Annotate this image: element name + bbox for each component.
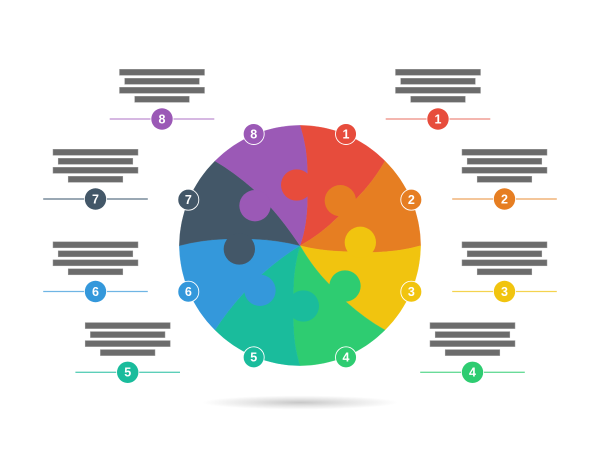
wheel badge 5 <box>243 347 264 368</box>
label block 6: 6 <box>92 285 99 299</box>
wheel badge 8: 8 <box>250 127 257 141</box>
tab teal <box>288 290 319 322</box>
wheel badge 2: 2 <box>408 193 415 207</box>
label block 2 <box>452 149 557 210</box>
wheel badge 3: 3 <box>408 285 415 299</box>
label block 3: 3 <box>501 285 508 299</box>
wheel badge 3 <box>401 281 422 302</box>
piece 1 red <box>300 125 385 246</box>
tab yellow <box>345 227 376 258</box>
label block 7 <box>43 149 148 210</box>
label block 5: 5 <box>124 366 131 380</box>
piece 2 orange <box>300 161 421 252</box>
label block 4 <box>420 323 525 383</box>
label block 5 <box>75 323 180 383</box>
label block 7: 7 <box>92 192 99 206</box>
wheel badge 4 <box>336 347 356 368</box>
piece 5 teal <box>215 246 300 366</box>
label block 3 <box>452 242 557 302</box>
wheel badge 1 <box>336 124 356 144</box>
piece 6 blue <box>179 239 300 330</box>
tab red <box>281 169 312 201</box>
label block 1 <box>386 69 490 130</box>
wheel badge 5: 5 <box>250 351 257 365</box>
label block 4: 4 <box>469 366 476 380</box>
wheel badge 2 <box>401 189 422 210</box>
tab purple <box>239 190 271 221</box>
wheel badge 7 <box>178 189 199 210</box>
wheel badge 6: 6 <box>185 285 192 299</box>
tab blue <box>244 275 276 306</box>
piece 3 yellow <box>300 246 421 330</box>
piece 7 slate <box>179 161 300 246</box>
label block 8 <box>110 69 214 130</box>
tab slate <box>224 233 255 265</box>
tab green <box>329 270 361 302</box>
piece 8 purple <box>215 125 307 246</box>
ground shadow <box>202 396 398 410</box>
puzzle wheel <box>179 125 421 366</box>
wheel badge 7: 7 <box>185 193 192 207</box>
wheel badge 6 <box>178 281 199 302</box>
label block 2: 2 <box>501 192 508 206</box>
wheel badge 4: 4 <box>343 351 350 365</box>
tab orange <box>325 185 356 216</box>
label block 8: 8 <box>159 112 166 126</box>
wheel badge 8 <box>243 124 264 144</box>
label block 6 <box>43 242 148 302</box>
piece 4 green <box>293 246 385 366</box>
wheel badge 1: 1 <box>343 127 350 141</box>
label block 1: 1 <box>435 112 442 126</box>
